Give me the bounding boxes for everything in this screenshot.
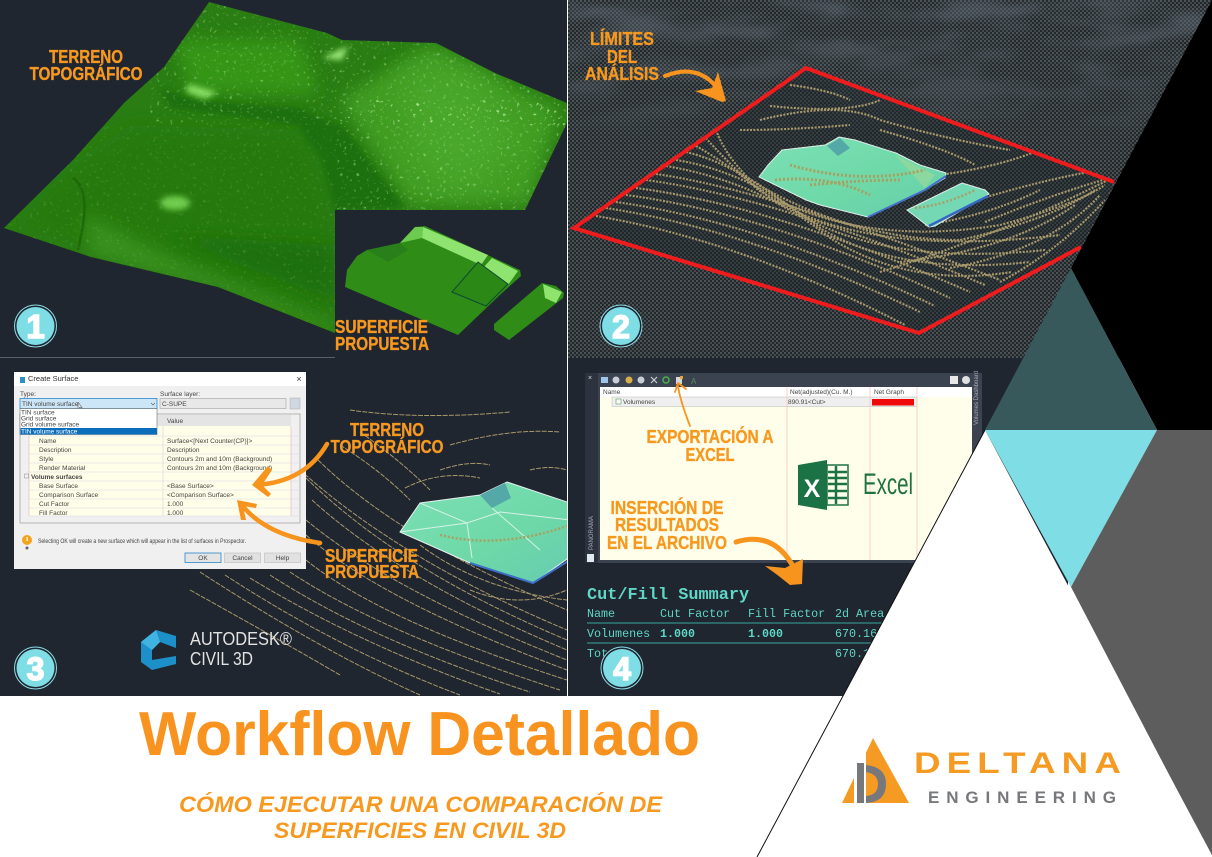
label: insercion de resultados [607, 497, 727, 553]
terrain surface [0, 0, 570, 340]
logo: deltana engineering [842, 738, 1127, 807]
property grid: Surface<[Next Counter(CP)]> [167, 438, 252, 445]
dashboard window: Volumenes [623, 399, 656, 406]
decorative triangles [757, 0, 1212, 857]
property grid: Render Material [39, 465, 86, 472]
badge 4: 4 [613, 651, 631, 687]
dashboard window: PANORAMA [589, 516, 595, 550]
label: terreno topografico: TOPOGRÁFICO [30, 63, 142, 84]
label: terreno topografico [30, 47, 142, 84]
arrow: limites [665, 72, 726, 102]
dialog window: Type: [20, 391, 36, 398]
property grid: Contours 2m and 10m (Background) [167, 456, 272, 463]
badge 3 [14, 647, 56, 689]
panel 3: create surface dialog [0, 358, 570, 696]
toolbar icons: A [691, 377, 697, 386]
icon: excel logo: X [804, 475, 821, 503]
dialog window [14, 372, 306, 569]
table: cut fill summary: 1.000 [660, 627, 695, 641]
logo: autodesk civil 3d [141, 628, 292, 670]
logo triangle mark [842, 738, 909, 805]
dashboard window: Name [603, 389, 621, 396]
property grid: <Base Surface> [167, 483, 214, 490]
arrow: superficie to comparison surface [237, 500, 320, 543]
label: insercion de resultados: EN EL ARCHIVO [607, 533, 727, 553]
proposed surface highlight [759, 137, 989, 227]
table: cut fill summary [587, 586, 905, 661]
dashboard window: Volumes Dashboard [974, 371, 980, 425]
type combo with dropdown: Grid volume surface [21, 422, 80, 428]
dialog window: Create Surface [28, 374, 78, 383]
dashboard window: × [588, 375, 592, 382]
logo: deltana engineering: DELTANA [914, 747, 1127, 780]
type combo with dropdown: TIN volume surface [22, 401, 79, 408]
proposed surface render [400, 482, 570, 583]
table: cut fill summary: Name [587, 607, 615, 621]
red limits polyline [574, 68, 1114, 333]
table: cut fill summary: Cut Factor [660, 607, 730, 621]
label: exportacion a excel: EXCEL [686, 445, 735, 465]
title: Workflow Detallado [139, 700, 700, 769]
badge 1 [14, 305, 56, 347]
label: limites del analisis: DEL [607, 47, 637, 67]
panel 2: analysis limits [568, 0, 1212, 358]
dialog buttons: Help [276, 555, 290, 562]
bottom white band [0, 696, 1212, 857]
property grid: Volume surfaces [31, 474, 83, 481]
arrow: terreno to base surface [252, 444, 327, 497]
logo: autodesk civil 3d: AUTODESK® [190, 628, 292, 649]
label: insercion de resultados: INSERCIÓN DE [610, 497, 724, 518]
dashboard window: 890.91<Cut> [788, 399, 826, 406]
property grid: Base Surface [39, 483, 78, 490]
dialog buttons [185, 553, 300, 562]
contour lines [596, 85, 1110, 325]
property grid [20, 414, 300, 523]
badge 3: 3 [27, 651, 44, 687]
dialog window: C-SUPE [162, 401, 187, 408]
dialog window: Surface layer: [160, 391, 200, 398]
badge 4 [601, 647, 643, 689]
type combo with dropdown: Grid surface [21, 416, 57, 422]
label: terreno topografico: TOPOGRÁFICO [330, 436, 444, 457]
type combo with dropdown: TIN surface [21, 410, 55, 416]
table: cut fill summary: Total [587, 647, 622, 661]
table: cut fill summary: Cut/Fill Summary [587, 586, 749, 605]
label: superficie propuesta: PROPUESTA [335, 334, 429, 354]
property grid: Value [167, 418, 184, 425]
subtitle [179, 792, 663, 843]
arrow: to summary [736, 539, 803, 585]
logo: autodesk civil 3d: CIVIL 3D [190, 648, 253, 669]
property grid: Style [39, 456, 54, 463]
table: cut fill summary: 670.16 [835, 627, 877, 641]
label: terreno topografico: TERRENO [49, 47, 123, 67]
label: exportacion a excel: EXPORTACIÓN A [646, 426, 774, 447]
warning note: Selecting OK will create a new surface which will appear in the list of surfaces in Prospector. [38, 538, 246, 545]
dashboard window: Net(adjusted)(Cu. M.) [790, 389, 852, 396]
type combo with dropdown [20, 398, 157, 436]
type combo with dropdown: TIN volume surface [21, 428, 78, 436]
badge 2: 2 [612, 309, 630, 345]
warning note [22, 535, 246, 550]
label: limites del analisis: ANÁLISIS [585, 63, 659, 84]
label: exportacion a excel [646, 426, 774, 465]
property grid: Comparison Surface [39, 492, 99, 499]
subtitle: CÓMO EJECUTAR UNA COMPARACIÓN DE [179, 792, 663, 817]
icon: excel logo [798, 460, 913, 510]
proposed surface models [345, 226, 564, 340]
badge 1: 1 [26, 308, 45, 345]
table: cut fill summary: 670.16 [835, 647, 877, 661]
property grid: 1.000 [167, 501, 184, 508]
property grid: 1.000 [167, 510, 184, 517]
property grid: Contours 2m and 10m (Background) [167, 465, 272, 472]
label: terreno topografico [330, 420, 444, 457]
contour lines [190, 410, 567, 695]
label: limites del analisis: LÍMITES [590, 28, 654, 49]
table: cut fill summary: Volumenes [587, 627, 650, 641]
label: limites del analisis [585, 28, 659, 84]
panel 4: volumes dashboard and export [568, 358, 1068, 696]
dialog buttons: Cancel [232, 555, 253, 562]
label: terreno topografico: TERRENO [350, 420, 424, 440]
property grid: Fill Factor [39, 510, 68, 517]
label: superficie propuesta [335, 317, 429, 354]
property grid: Description [39, 447, 72, 454]
logo: deltana engineering: ENGINEERING [928, 788, 1116, 807]
dialog window: × [296, 374, 302, 384]
label: superficie propuesta: SUPERFICIE [325, 546, 418, 566]
panel 1: terrain and proposed surface [0, 0, 570, 358]
icon: excel logo: Excel [863, 468, 913, 501]
property grid: <Comparison Surface> [167, 492, 234, 499]
property grid: Name [39, 438, 57, 445]
badge 2 [600, 305, 642, 347]
label: insercion de resultados: RESULTADOS [615, 515, 719, 535]
dashboard window: Net Graph [874, 389, 904, 396]
table: cut fill summary: 1.000 [748, 627, 783, 641]
property grid: Cut Factor [39, 501, 70, 508]
label: superficie propuesta: PROPUESTA [325, 562, 419, 582]
table: cut fill summary: Fill Factor [748, 607, 825, 621]
dialog buttons: OK [198, 555, 208, 562]
property grid: Description [167, 447, 200, 454]
label: superficie propuesta [325, 546, 419, 582]
subtitle: SUPERFICIES EN CIVIL 3D [274, 818, 566, 843]
arrow: to export button [675, 383, 690, 426]
toolbar icons [601, 376, 970, 386]
label: superficie propuesta: SUPERFICIE [335, 317, 428, 337]
table: cut fill summary: 2d Area [835, 607, 884, 621]
dashboard window [585, 371, 982, 563]
